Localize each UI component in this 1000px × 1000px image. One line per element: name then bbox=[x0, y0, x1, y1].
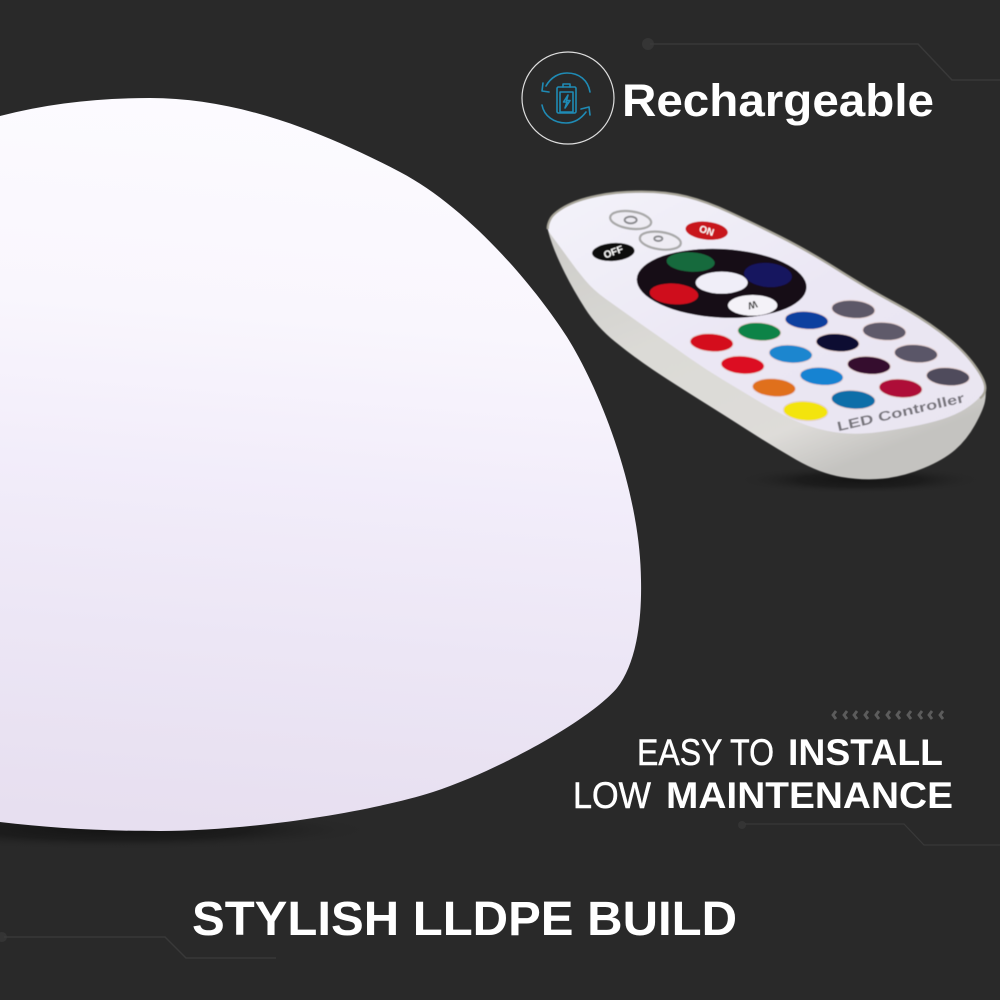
button: on bbox=[684, 219, 729, 242]
ring button: blue bbox=[743, 261, 793, 289]
text block: easy to install: INSTALL bbox=[788, 732, 943, 773]
circuit decoration: lower right bbox=[738, 821, 1000, 845]
ring centre bbox=[696, 272, 748, 294]
circuit decoration: bottom left bbox=[0, 932, 276, 958]
badge circle bbox=[522, 52, 614, 144]
remote control: OFF bbox=[602, 244, 625, 261]
icon: battery with recycling arrows bbox=[542, 73, 590, 123]
dome shadow bbox=[0, 810, 380, 850]
ring button: white bbox=[728, 295, 777, 316]
heading: stylish lldpe build: STYLISH LLDPE BUILD bbox=[192, 893, 737, 946]
colour button grid bbox=[689, 299, 970, 422]
dome lamp bbox=[0, 98, 641, 831]
colour ring bbox=[635, 245, 808, 322]
ring button: red bbox=[649, 282, 699, 306]
circuit decoration: top right bbox=[642, 38, 1000, 80]
remote rim bbox=[548, 192, 985, 398]
remote body bbox=[548, 192, 986, 479]
chevron row bbox=[833, 711, 943, 719]
rechargeable badge bbox=[522, 52, 614, 144]
remote face bbox=[548, 192, 985, 434]
remote control bbox=[548, 192, 986, 479]
remote label: LED Controller bbox=[836, 390, 966, 434]
ring button: green bbox=[666, 251, 715, 273]
text block: low maintenance: MAINTENANCE bbox=[666, 775, 953, 816]
text block: easy to install: EASY TO bbox=[637, 732, 774, 773]
remote shadow bbox=[735, 466, 985, 494]
power icon buttons bbox=[609, 209, 682, 252]
remote control: ON bbox=[698, 224, 715, 239]
heading: rechargeable: Rechargeable bbox=[622, 75, 934, 126]
button: off bbox=[591, 242, 635, 262]
remote control: W bbox=[746, 298, 758, 311]
text block: low maintenance: LOW bbox=[573, 775, 651, 816]
text block: easy to install bbox=[637, 732, 943, 773]
